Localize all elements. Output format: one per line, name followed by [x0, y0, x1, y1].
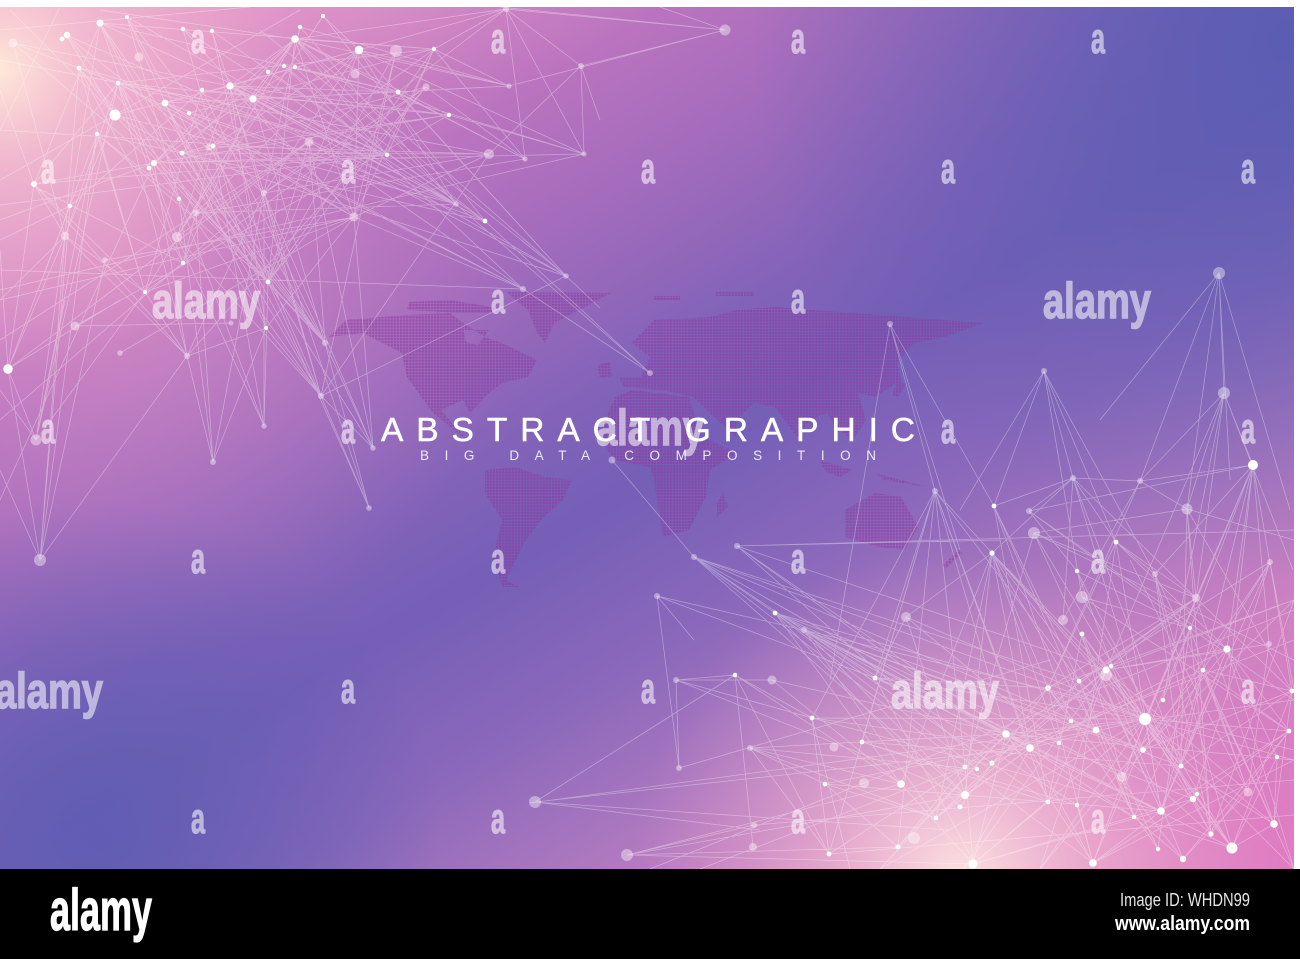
watermark: small repeated letters: a — [791, 15, 806, 63]
watermark: small repeated letters: a — [791, 275, 806, 323]
network nodes: bottom right — [733, 460, 1294, 869]
watermark: small repeated letters: a — [1241, 665, 1256, 713]
Greenland and Arctic islands — [407, 292, 611, 343]
network mesh: bottom right — [530, 273, 1294, 869]
watermark: small repeated letters: a — [641, 665, 656, 713]
Southeast Asia islands — [819, 460, 927, 487]
watermark: large alamy words: alamy — [891, 663, 999, 719]
faint network nodes: top left — [8, 6, 730, 566]
watermark: small repeated letters: a — [491, 15, 506, 63]
faint network nodes: bottom right — [529, 267, 1273, 861]
watermark: small repeated letters: a — [41, 405, 56, 453]
footer bar — [0, 869, 1300, 959]
watermark: small repeated letters: a — [41, 145, 56, 193]
watermark: small repeated letters: a — [191, 795, 206, 843]
watermark: small repeated letters: a — [491, 795, 506, 843]
watermark: small repeated letters: a — [791, 795, 806, 843]
watermark: large alamy words — [0, 273, 1151, 719]
Australia and New Zealand — [845, 493, 962, 569]
South America — [485, 467, 572, 587]
subtitle: BIG DATA COMPOSITION — [420, 448, 876, 463]
watermark: small repeated letters: a — [1091, 795, 1106, 843]
watermark: small repeated letters: a — [1241, 145, 1256, 193]
image id: Image ID: WHDN99 — [1120, 890, 1250, 910]
watermark: small repeated letters: a — [791, 535, 806, 583]
watermark: large alamy words: alamy — [152, 273, 260, 329]
website: www.alamy.com — [1114, 913, 1250, 935]
watermark: large alamy words: alamy — [1043, 273, 1151, 329]
network mesh: top left — [0, 7, 725, 560]
dotted world map — [329, 292, 984, 587]
watermark: small repeated letters: a — [941, 145, 956, 193]
watermark: small repeated letters: a — [491, 535, 506, 583]
watermark: large alamy words: alamy — [596, 400, 704, 456]
Africa and Madagascar — [598, 390, 736, 537]
watermark: small repeated letters: a — [1091, 15, 1106, 63]
title: ABSTRACT GRAPHIC — [381, 412, 915, 449]
watermark: small repeated letters: a — [191, 15, 206, 63]
watermark: small repeated letters: a — [341, 665, 356, 713]
watermark: small repeated letters: a — [341, 145, 356, 193]
watermark: small repeated letters: a — [941, 405, 956, 453]
watermark: small repeated letters: a — [341, 405, 356, 453]
watermark: small repeated letters: a — [1241, 405, 1256, 453]
watermark: small repeated letters: a — [1091, 535, 1106, 583]
Eurasia — [598, 292, 984, 440]
network nodes: top left — [3, 14, 487, 374]
watermark: small repeated letters: a — [191, 535, 206, 583]
watermark: small repeated letters: a — [641, 145, 656, 193]
footer logo: alamy — [50, 878, 152, 943]
watermark: small repeated letters: a — [491, 275, 506, 323]
North America — [329, 313, 537, 447]
